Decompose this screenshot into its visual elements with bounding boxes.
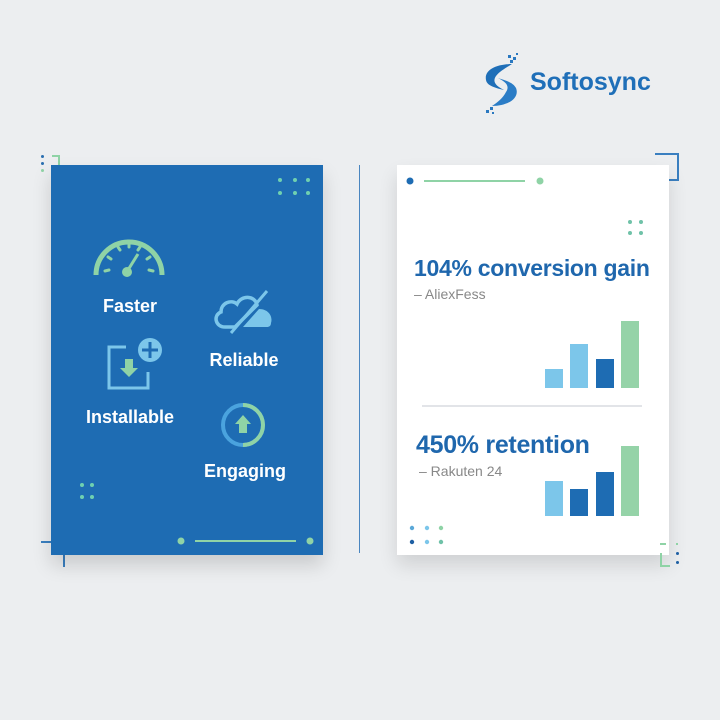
stat 2 heading: 450% retention bbox=[416, 431, 590, 459]
stat 1 heading: 104% conversion gain bbox=[414, 255, 650, 281]
stat 1 source: – AliexFess bbox=[414, 286, 486, 302]
panel: stats bbox=[397, 165, 669, 555]
label: Engaging: Engaging bbox=[204, 461, 286, 481]
corner decorations left bbox=[41, 155, 60, 172]
icon: gauge bbox=[94, 240, 164, 277]
label: Installable: Installable bbox=[86, 407, 174, 427]
panel: features bbox=[51, 165, 323, 555]
stat 2 source: – Rakuten 24 bbox=[419, 463, 502, 479]
bracket top right bbox=[655, 153, 679, 181]
icon: cloud bbox=[214, 290, 272, 334]
icon: install bbox=[108, 338, 162, 390]
bracket bottom right bbox=[660, 543, 679, 567]
label: Faster: Faster bbox=[103, 296, 157, 316]
bar chart 1 bbox=[545, 321, 639, 388]
label: Reliable: Reliable bbox=[209, 350, 279, 370]
divider bbox=[359, 165, 360, 553]
logo: Softosync bbox=[530, 68, 651, 96]
icon: engaging bbox=[221, 403, 265, 447]
logo bbox=[486, 53, 651, 114]
bar chart 2 bbox=[545, 446, 639, 516]
